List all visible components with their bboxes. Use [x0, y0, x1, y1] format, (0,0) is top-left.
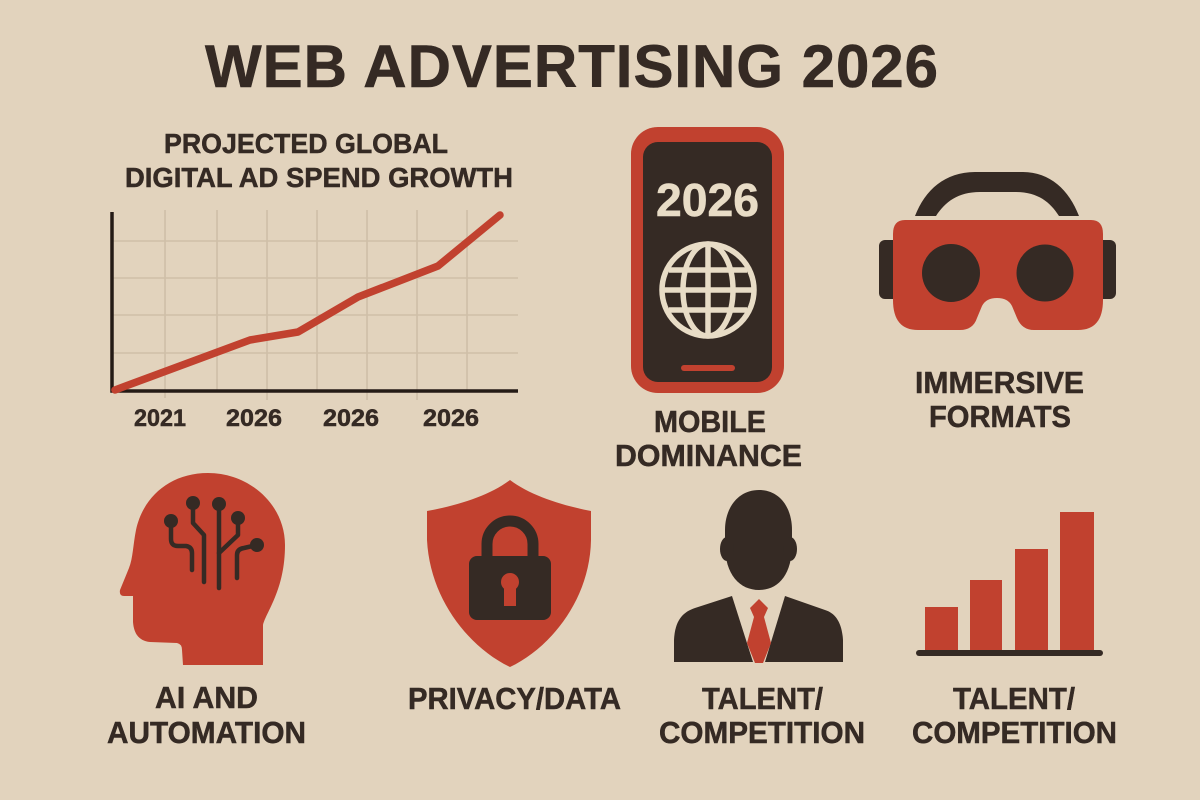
- label: AI and automation: AUTOMATION: [107, 715, 306, 750]
- panel: mobile dominance: [615, 127, 802, 473]
- label: talent/competition: TALENT/: [953, 681, 1075, 716]
- chart heading: PROJECTED GLOBAL: [164, 128, 448, 159]
- icon: smartphone: 2026: [656, 174, 759, 226]
- growth line: [115, 215, 500, 390]
- icon: businessman: [674, 490, 843, 663]
- axis labels: 2026: [323, 405, 379, 432]
- label: talent/competition: COMPETITION: [659, 715, 865, 750]
- label: immersive formats: FORMATS: [929, 399, 1071, 434]
- icon: head with circuits: [120, 473, 285, 665]
- chart heading: DIGITAL AD SPEND GROWTH: [125, 162, 513, 193]
- icon: smartphone: [631, 127, 784, 393]
- label: talent/competition: COMPETITION: [912, 715, 1117, 750]
- label: talent/competition: [912, 681, 1117, 750]
- icon: shield with padlock: [427, 480, 591, 667]
- chart axes: [112, 212, 518, 391]
- label: privacy/data: PRIVACY/DATA: [408, 681, 621, 716]
- label: talent/competition: [659, 681, 865, 750]
- axis labels: 2026: [226, 405, 282, 432]
- axis labels: 2026: [423, 405, 479, 432]
- panel: digital ad spend growth line chart: [111, 128, 518, 432]
- panel: immersive formats: [879, 172, 1116, 434]
- icon: VR headset: [879, 172, 1116, 330]
- icon: bar chart: [916, 512, 1103, 656]
- panel: talent and competition, bars: [912, 512, 1117, 750]
- label: talent/competition: TALENT/: [702, 681, 823, 716]
- panel: AI and automation: [107, 473, 306, 750]
- axis labels: [134, 405, 479, 432]
- label: AI and automation: AI AND: [155, 680, 258, 715]
- label: immersive formats: [915, 365, 1084, 434]
- label: AI and automation: [107, 680, 306, 750]
- title: WEB ADVERTISING 2026: [205, 33, 938, 100]
- label: mobile dominance: [615, 404, 802, 473]
- label: mobile dominance: MOBILE: [654, 404, 766, 439]
- chart heading: [125, 128, 513, 193]
- panel: talent and competition, person: [659, 490, 865, 750]
- label: mobile dominance: DOMINANCE: [615, 438, 802, 473]
- panel: privacy and data: [408, 480, 621, 716]
- axis labels: 2021: [134, 405, 186, 432]
- label: immersive formats: IMMERSIVE: [915, 365, 1084, 400]
